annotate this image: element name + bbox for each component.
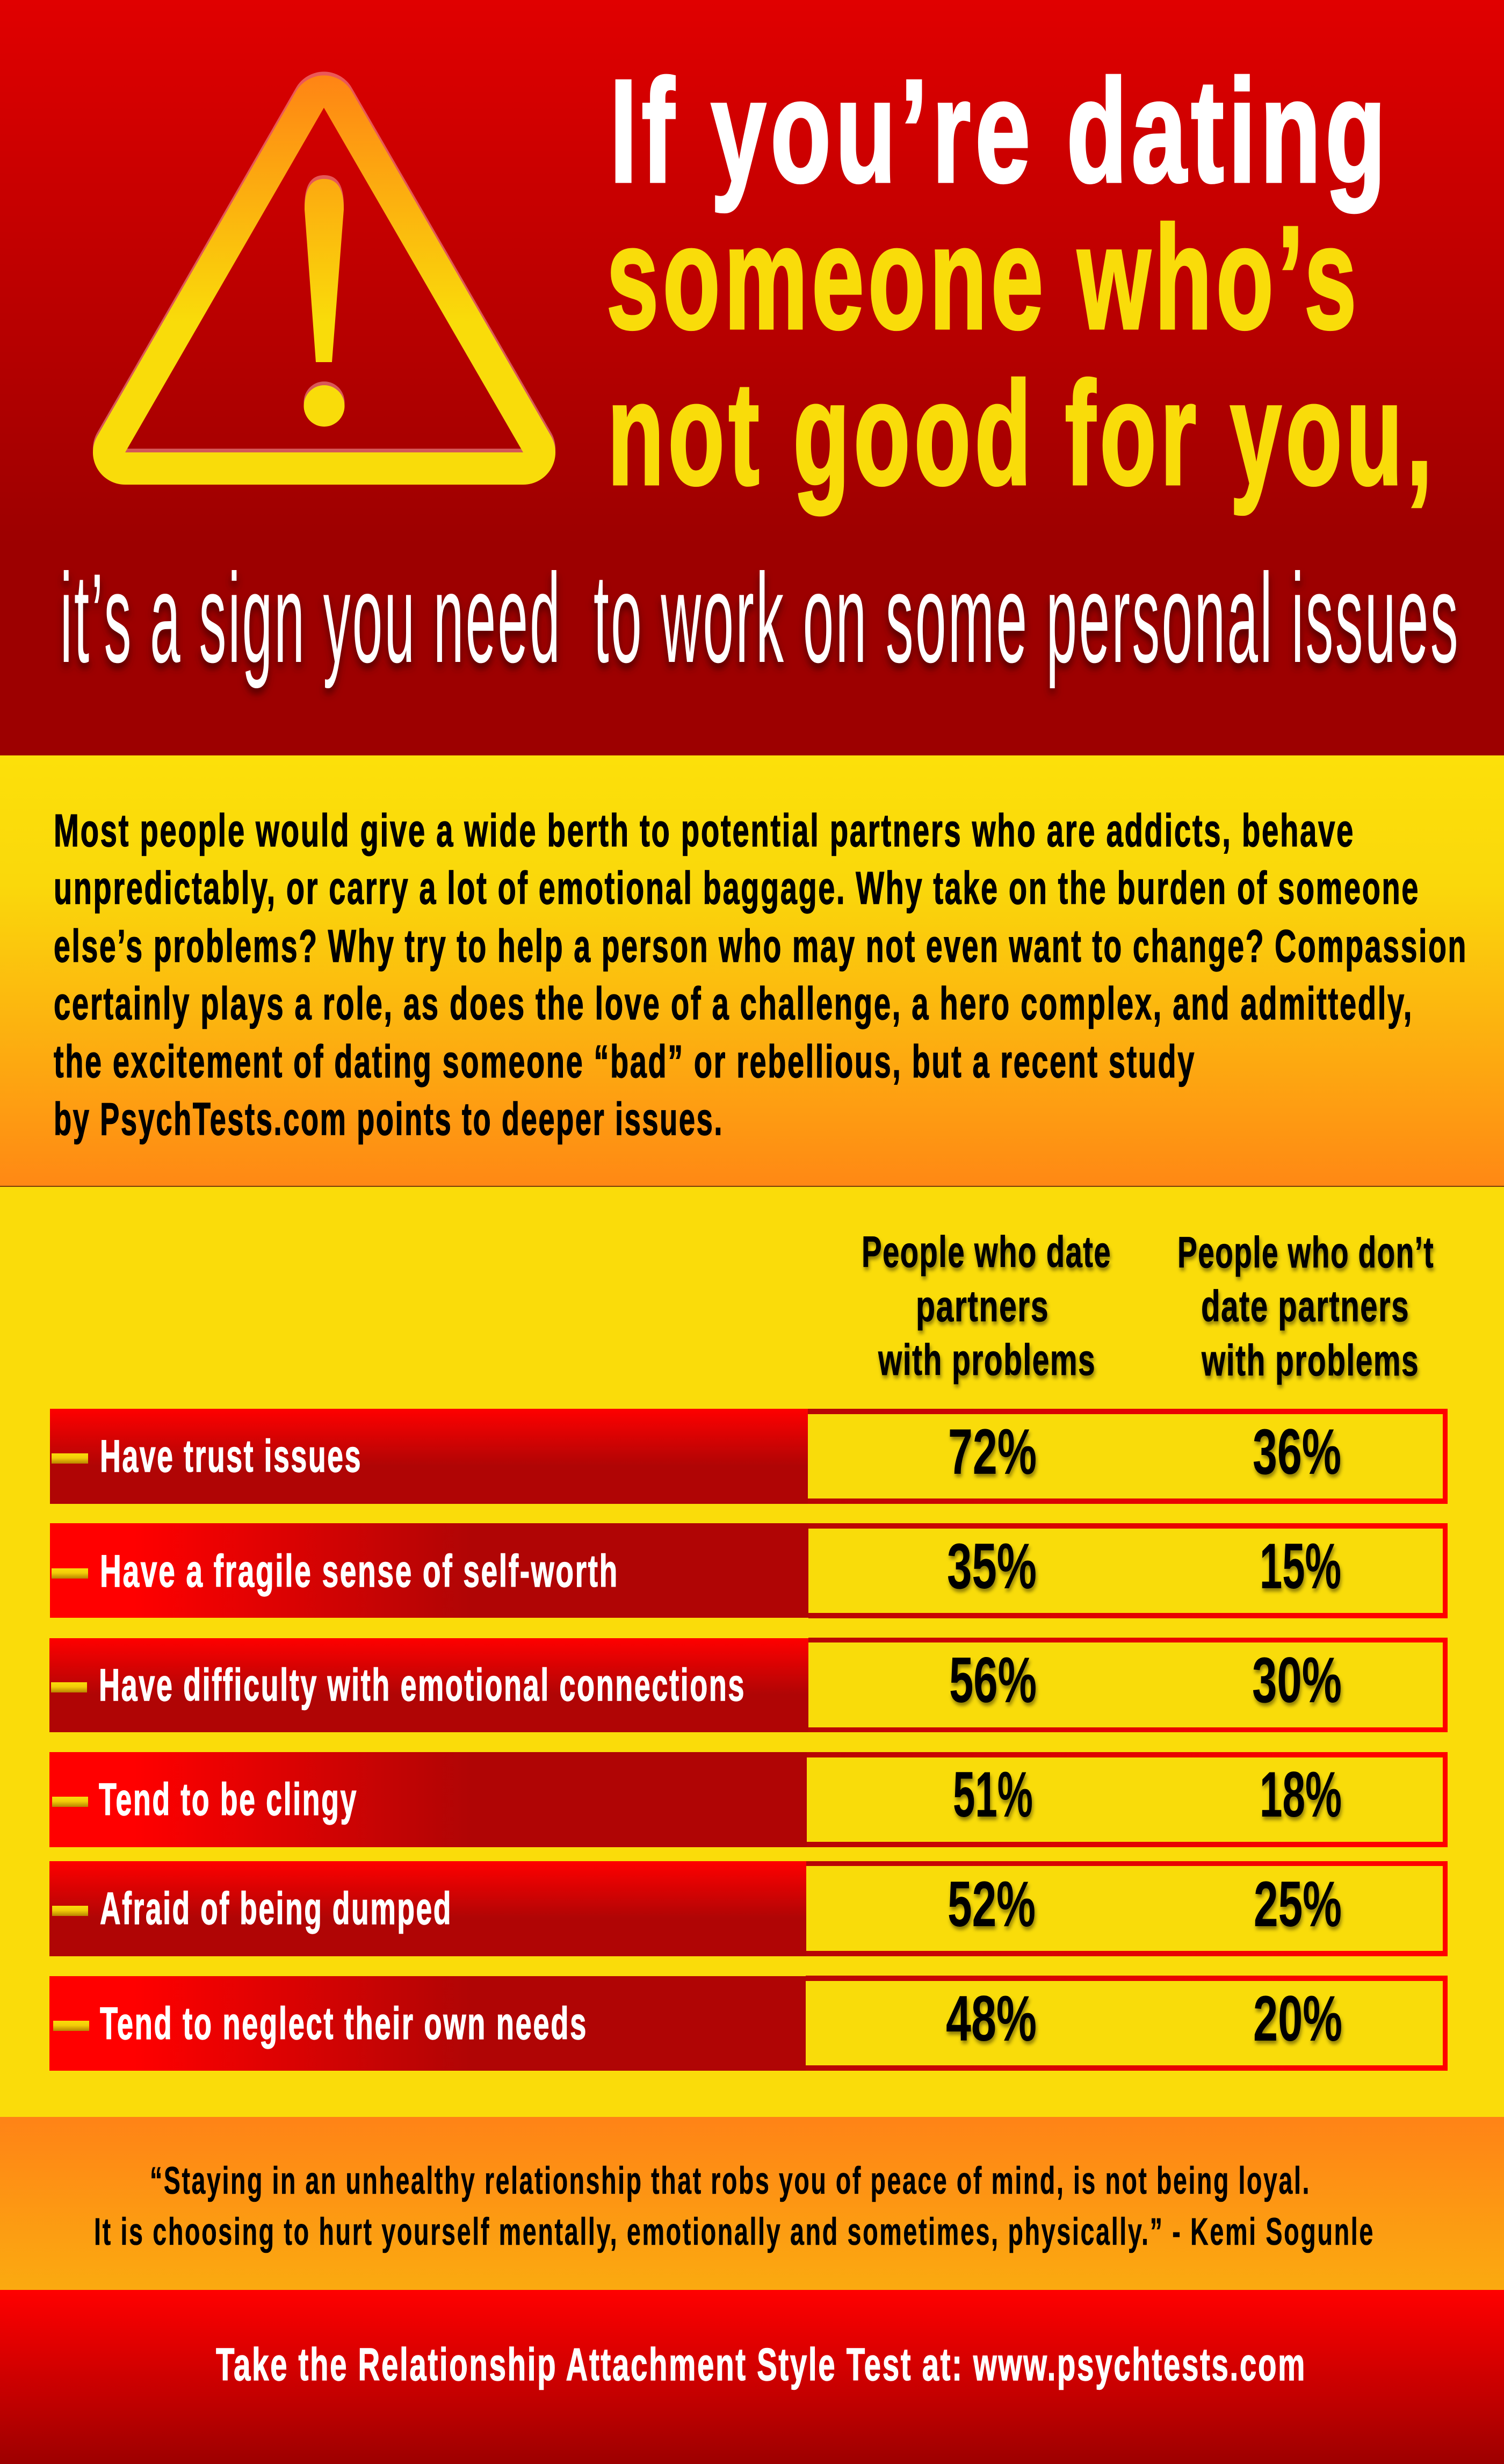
row: tend to neglect their own needs xyxy=(49,1976,1448,2071)
panel: quote xyxy=(0,2117,1504,2290)
column heading: people who date partners with problems xyxy=(862,1228,1111,1385)
row: have difficulty with emotional connections: 30% xyxy=(1252,1644,1342,1716)
text block: intro xyxy=(54,805,1467,1145)
subtitle: it’s a sign you need xyxy=(60,547,562,689)
column heading: people who date partners with problems: partners xyxy=(916,1282,1049,1331)
row: afraid of being dumped: 52% xyxy=(948,1868,1036,1940)
row: have difficulty with emotional connections xyxy=(49,1638,1448,1732)
row: have trust issues: 72% xyxy=(948,1416,1037,1488)
row: tend to be clingy: Tend to be clingy xyxy=(99,1774,358,1825)
row: afraid of being dumped: Afraid of being dumped xyxy=(100,1883,452,1934)
text block: intro: by PsychTests.com points to deeper issues. xyxy=(54,1094,724,1145)
row: tend to neglect their own needs: 48% xyxy=(946,1983,1037,2055)
row: have trust issues xyxy=(50,1409,1448,1504)
row: afraid of being dumped: 25% xyxy=(1254,1868,1342,1940)
row: have a fragile sense of self-worth: Have a fragile sense of self-worth xyxy=(100,1546,619,1596)
row: have difficulty with emotional connections: 56% xyxy=(949,1644,1037,1716)
column heading: people who don't date partners with problems: date partners xyxy=(1201,1282,1409,1331)
column heading: people who date partners with problems: with problems xyxy=(878,1336,1096,1385)
row: afraid of being dumped xyxy=(49,1861,1448,1956)
row: tend to neglect their own needs: 20% xyxy=(1253,1983,1342,2055)
row: have a fragile sense of self-worth: 35% xyxy=(947,1530,1037,1602)
row: tend to be clingy: 51% xyxy=(953,1759,1033,1831)
row: tend to be clingy xyxy=(49,1752,1448,1847)
row: have trust issues: Have trust issues xyxy=(100,1431,362,1481)
row: have difficulty with emotional connections: Have difficulty with emotional connections xyxy=(99,1660,746,1710)
panel: footer xyxy=(0,2290,1504,2464)
row: have trust issues: 36% xyxy=(1253,1416,1341,1488)
icon: warning triangle xyxy=(93,71,555,485)
panel: comparison table xyxy=(0,1187,1504,2117)
title xyxy=(606,49,1436,516)
row: have a fragile sense of self-worth: 15% xyxy=(1260,1530,1341,1602)
text block: quote xyxy=(94,2160,1375,2253)
panel: intro paragraph xyxy=(0,755,1504,1187)
column heading: people who don't date partners with problems xyxy=(1177,1228,1434,1385)
row: have a fragile sense of self-worth xyxy=(50,1523,1448,1618)
row: tend to neglect their own needs: Tend to neglect their own needs xyxy=(100,1998,588,2049)
column heading: people who date partners with problems: People who date xyxy=(862,1228,1111,1277)
row: tend to be clingy: 18% xyxy=(1260,1759,1342,1831)
panel: header xyxy=(0,0,1504,755)
